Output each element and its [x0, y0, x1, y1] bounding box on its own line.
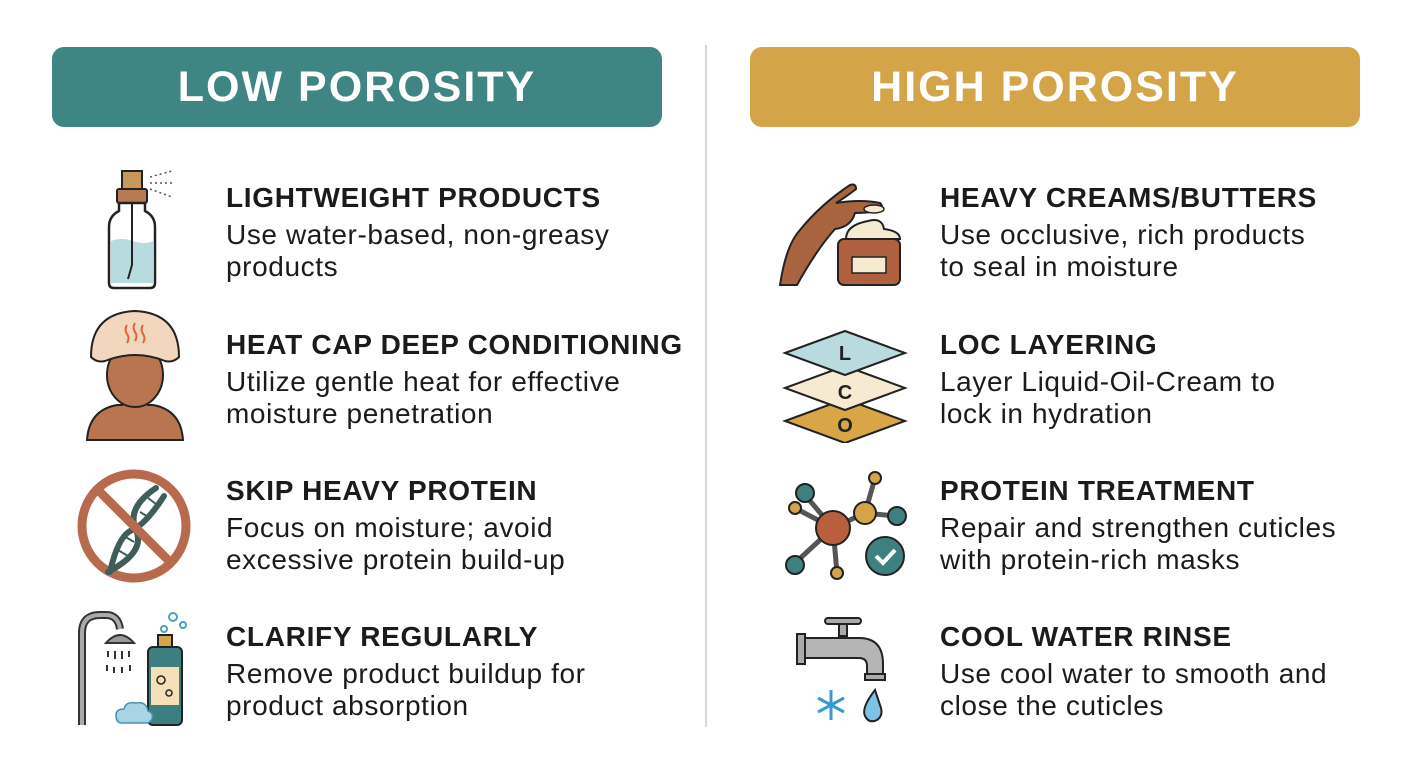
icon: spray bottle: [108, 170, 172, 290]
item: skip heavy protein: SKIP HEAVY PROTEIN: [226, 475, 537, 506]
item: cool water rinse: [940, 621, 1327, 721]
item: heavy creams/butters: Use occlusive, rich products: [940, 219, 1305, 250]
header: high porosity: [750, 47, 1360, 127]
icon: molecule with check: [785, 471, 907, 580]
icon: LOC layers: O: [837, 415, 853, 437]
icon: LOC layers: C: [838, 382, 852, 404]
item: skip heavy protein: excessive protein build-up: [226, 544, 565, 575]
icon: shower and bottle: [78, 611, 187, 726]
item: clarify regularly: CLARIFY REGULARLY: [226, 621, 538, 652]
item: protein treatment: with protein-rich masks: [940, 544, 1240, 575]
item: heat cap deep conditioning: Utilize gentle heat for effective: [226, 366, 620, 397]
icon: hand and cream jar: [778, 184, 901, 286]
header: low porosity: [52, 47, 662, 127]
header: low porosity: LOW POROSITY: [178, 63, 536, 111]
item: protein treatment: [940, 475, 1336, 575]
item: cool water rinse: close the cuticles: [940, 690, 1164, 721]
item: LOC layering: [940, 329, 1276, 429]
icon: faucet snowflake drop: [796, 617, 886, 722]
icon: heat cap person: [86, 310, 184, 441]
item: lightweight products: Use water-based, non-greasy: [226, 219, 610, 250]
item: protein treatment: PROTEIN TREATMENT: [940, 475, 1255, 506]
item: clarify regularly: product absorption: [226, 690, 469, 721]
item: heat cap deep conditioning: HEAT CAP DEEP CONDITIONING: [226, 329, 683, 360]
item: cool water rinse: Use cool water to smooth and: [940, 658, 1327, 689]
item: clarify regularly: [226, 621, 586, 721]
item: heat cap deep conditioning: [226, 329, 683, 429]
item: LOC layering: Layer Liquid-Oil-Cream to: [940, 366, 1276, 397]
item: skip heavy protein: Focus on moisture; avoid: [226, 512, 553, 543]
item: heavy creams/butters: [940, 182, 1317, 282]
item: heavy creams/butters: to seal in moisture: [940, 251, 1179, 282]
item: lightweight products: [226, 182, 610, 282]
item: clarify regularly: Remove product buildup for: [226, 658, 586, 689]
item: heavy creams/butters: HEAVY CREAMS/BUTTERS: [940, 182, 1317, 213]
item: heat cap deep conditioning: moisture penetration: [226, 398, 493, 429]
item: cool water rinse: COOL WATER RINSE: [940, 621, 1232, 652]
item: skip heavy protein: [226, 475, 565, 575]
icon: LOC layers: [782, 330, 908, 443]
icon: no protein: [78, 470, 190, 582]
item: LOC layering: lock in hydration: [940, 398, 1153, 429]
item: lightweight products: LIGHTWEIGHT PRODUCTS: [226, 182, 601, 213]
icon: LOC layers: L: [839, 343, 851, 365]
header: high porosity: HIGH POROSITY: [871, 63, 1239, 111]
item: lightweight products: products: [226, 251, 338, 282]
item: protein treatment: Repair and strengthen cuticles: [940, 512, 1336, 543]
item: LOC layering: LOC LAYERING: [940, 329, 1157, 360]
